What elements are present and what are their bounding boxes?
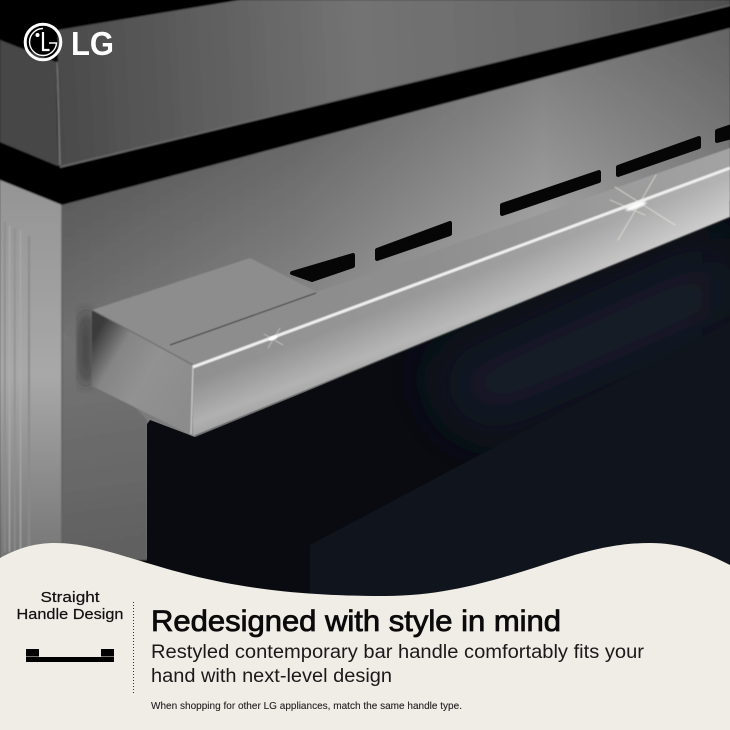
handle type label: Straight (40, 590, 100, 606)
handle top face (92, 148, 730, 367)
icon: straight handle (26, 649, 114, 662)
vent slots (292, 126, 730, 280)
upper drawer front (58, 0, 730, 167)
LG logo (25, 24, 114, 62)
handle type label (16, 590, 124, 623)
bar handle (78, 148, 730, 436)
handle end cap (92, 310, 193, 436)
body text: Restyled contemporary bar handle comfortably fits your (151, 642, 645, 663)
body text (151, 642, 645, 687)
oven window (147, 217, 730, 610)
sparkle highlights (264, 175, 675, 348)
footnote: When shopping for other LG appliances, match the same handle type. (151, 701, 462, 712)
handle front face (193, 168, 730, 436)
LG logo: LG (71, 25, 114, 62)
heading: Redesigned with style in mind (151, 605, 561, 638)
side panel (0, 180, 62, 560)
dotted divider (132, 602, 134, 693)
body text: hand with next-level design (151, 666, 392, 687)
bottom wave panel (0, 543, 730, 730)
upper drawer left side (0, 40, 58, 166)
handle type label: Handle Design (16, 607, 124, 623)
main front panel (62, 28, 730, 560)
